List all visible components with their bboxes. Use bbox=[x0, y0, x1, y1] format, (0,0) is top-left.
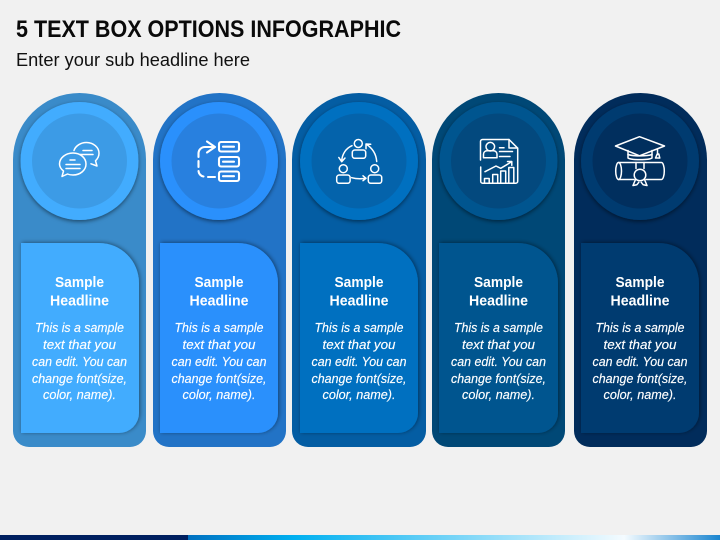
card: option 4 text: change font(size, bbox=[451, 372, 546, 386]
card: option 1 text: can edit. You can bbox=[32, 355, 127, 369]
card: option 3 text: Headline bbox=[330, 294, 388, 310]
icon: graduation cap and diploma bbox=[616, 137, 664, 186]
card: option 1 text bbox=[21, 243, 139, 433]
icon: process flow bbox=[198, 142, 239, 181]
panel: option 3 bbox=[292, 93, 426, 447]
card: option 3 text: change font(size, bbox=[312, 372, 406, 386]
card: option 1 text: Sample bbox=[55, 275, 104, 291]
card: option 5 text: change font(size, bbox=[592, 372, 688, 386]
panel: option 2 bbox=[153, 93, 286, 447]
card: option 5 text: Sample bbox=[616, 275, 664, 291]
icon: chat bubbles bbox=[60, 142, 99, 176]
card: option 5 text: Headline bbox=[610, 294, 670, 310]
card: option 3 text: text that you bbox=[322, 338, 396, 352]
card: option 1 text: This is a sample bbox=[35, 321, 124, 335]
card: option 5 text: This is a sample bbox=[596, 321, 685, 335]
icon: team cycle bbox=[337, 140, 382, 183]
card: option 3 text bbox=[300, 243, 418, 433]
card: option 3 text: This is a sample bbox=[314, 321, 404, 335]
footer bar bbox=[0, 535, 720, 540]
card: option 4 text: Headline bbox=[469, 294, 528, 310]
card: option 2 text: can edit. You can bbox=[172, 355, 267, 369]
card: option 1 text: color, name). bbox=[43, 388, 116, 402]
card: option 2 text: Headline bbox=[190, 294, 248, 310]
card: option 2 text: text that you bbox=[182, 338, 256, 352]
card: option 3 text: Sample bbox=[334, 275, 384, 291]
card: option 5 text: color, name). bbox=[604, 388, 676, 402]
card: option 4 text bbox=[439, 243, 558, 433]
icon: report document bbox=[480, 140, 518, 183]
card: option 4 text: Sample bbox=[474, 275, 523, 291]
card: option 2 text bbox=[160, 243, 278, 433]
subtitle: Enter your sub headline here bbox=[16, 50, 250, 70]
card: option 1 text: text that you bbox=[43, 338, 116, 352]
card: option 5 text bbox=[581, 243, 699, 433]
panel: option 1 bbox=[13, 93, 146, 447]
card: option 1 text: Headline bbox=[50, 294, 109, 310]
card: option 4 text: can edit. You can bbox=[451, 355, 546, 369]
panel: option 4 bbox=[432, 93, 565, 447]
card: option 1 text: change font(size, bbox=[32, 372, 127, 386]
card: option 2 text: This is a sample bbox=[174, 321, 264, 335]
card: option 2 text: change font(size, bbox=[172, 372, 266, 386]
card: option 4 text: This is a sample bbox=[454, 321, 543, 335]
card: option 5 text: can edit. You can bbox=[592, 355, 688, 369]
card: option 3 text: color, name). bbox=[322, 388, 396, 402]
title: 5 TEXT BOX OPTIONS INFOGRAPHIC bbox=[16, 16, 401, 43]
card: option 3 text: can edit. You can bbox=[312, 355, 407, 369]
panel: option 5 bbox=[574, 93, 707, 447]
card: option 4 text: color, name). bbox=[462, 388, 535, 402]
card: option 5 text: text that you bbox=[604, 338, 677, 352]
card: option 4 text: text that you bbox=[462, 338, 535, 352]
card: option 2 text: Sample bbox=[194, 275, 244, 291]
card: option 2 text: color, name). bbox=[182, 388, 256, 402]
